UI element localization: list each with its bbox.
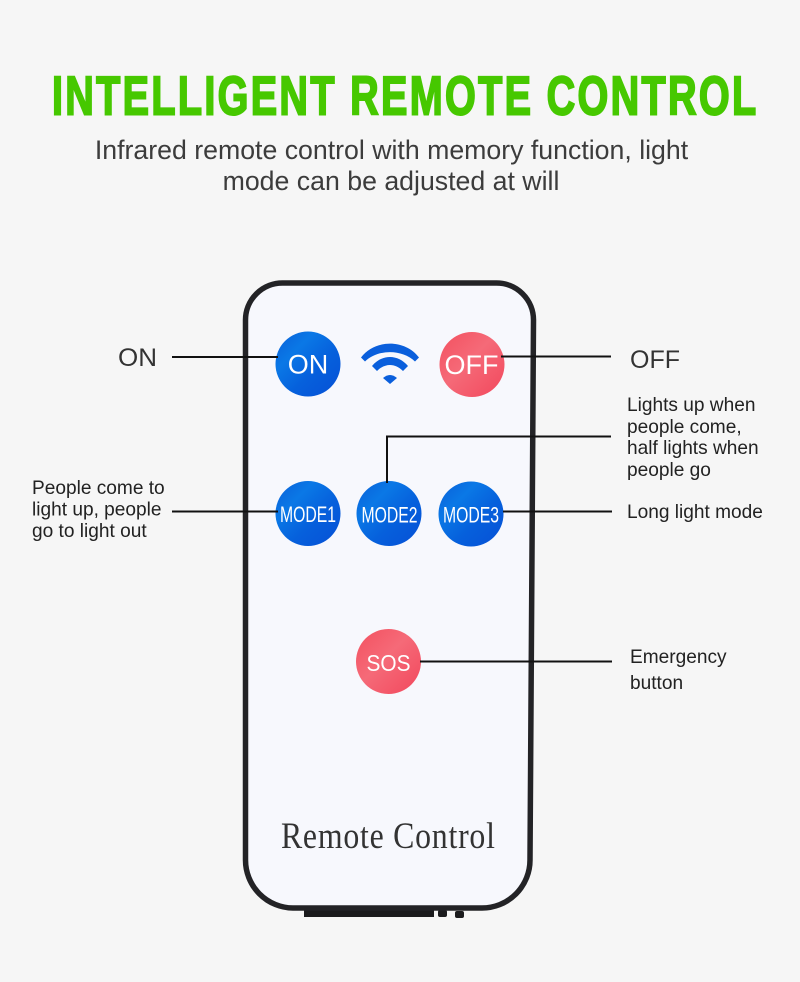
- button: ON: ON: [288, 350, 328, 380]
- button: OFF: [440, 332, 504, 397]
- label: mode 2 description: Lights up when: [627, 395, 755, 416]
- button: ON: [276, 332, 340, 396]
- label: mode 2 description: half lights when: [627, 438, 759, 459]
- label: emergency button: button: [630, 673, 683, 694]
- subtitle: mode can be adjusted at will: [223, 166, 559, 196]
- label: OFF: OFF: [630, 346, 680, 374]
- remote control body: [246, 283, 534, 918]
- button: MODE3: MODE3: [443, 502, 499, 528]
- label: mode 1 description: [32, 478, 165, 542]
- button: MODE3: [438, 482, 504, 546]
- label: mode 3 description: Long light mode: [627, 502, 763, 523]
- icon: wireless signal: [361, 344, 419, 384]
- label: emergency button: Emergency: [630, 647, 727, 668]
- button: OFF: OFF: [444, 350, 498, 380]
- label: mode 1 description: People come to: [32, 478, 165, 499]
- subtitle: Infrared remote control with memory function, light: [95, 135, 689, 165]
- button: MODE1: [276, 481, 340, 546]
- button: MODE2: [356, 481, 422, 546]
- remote label: Remote Control: [281, 816, 495, 857]
- button: SOS: [356, 629, 421, 694]
- leader lines: [172, 356, 612, 662]
- label: mode 2 description: people come,: [627, 417, 742, 438]
- button: MODE1: MODE1: [280, 502, 336, 527]
- label: ON: ON: [118, 344, 157, 372]
- label: mode 1 description: light up, people: [32, 500, 162, 520]
- button: SOS: SOS: [366, 650, 410, 676]
- label: mode 2 description: [627, 395, 759, 481]
- label: mode 1 description: go to light out: [32, 521, 147, 542]
- label: emergency button: [630, 647, 727, 694]
- subtitle: [95, 135, 689, 196]
- button: MODE2: MODE2: [362, 502, 418, 528]
- label: mode 2 description: people go: [627, 460, 711, 481]
- title: INTELLIGENT REMOTE CONTROL: [52, 66, 756, 127]
